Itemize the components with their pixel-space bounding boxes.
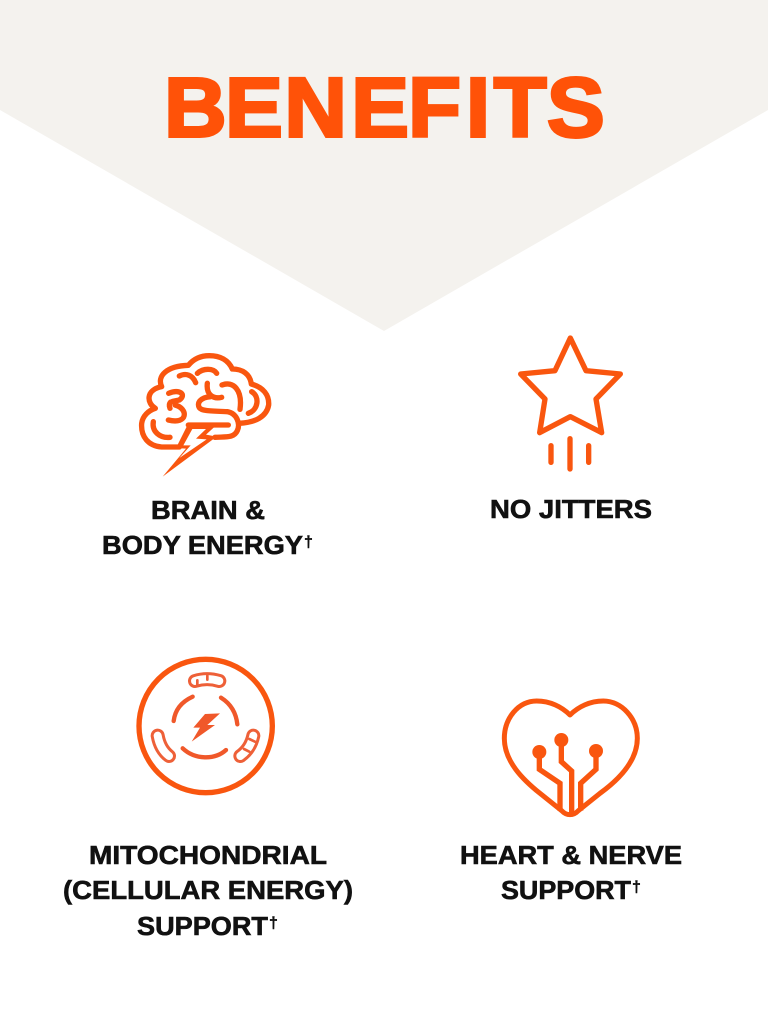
label: brain and body energy: BRAIN & (151, 497, 265, 525)
label: brain and body energy: BODY ENERGY (102, 532, 303, 560)
organelle: top (195, 676, 219, 686)
icon: mitochondria circle (139, 659, 272, 793)
label: mitochondrial support: (CELLULAR ENERGY) (63, 877, 353, 905)
organelle: right (240, 736, 255, 756)
label: mitochondrial support: † (269, 915, 278, 932)
label: heart and nerve support: SUPPORT (501, 877, 631, 905)
header banner (0, 0, 768, 331)
icon: star with motion lines (521, 338, 620, 469)
label: brain and body energy: † (304, 534, 313, 551)
label: heart and nerve support (460, 842, 682, 905)
label: mitochondrial support: MITOCHONDRIAL (89, 842, 327, 870)
label: brain and body energy (102, 497, 313, 560)
label: mitochondrial support: SUPPORT (137, 913, 268, 941)
label: mitochondrial support (63, 842, 353, 941)
organelle: left (158, 736, 169, 756)
icon: brain with lightning bolt (142, 356, 269, 477)
icon: heart with circuit (504, 701, 637, 815)
title: BENEFITS (164, 62, 605, 155)
label: no jitters: NO JITTERS (490, 496, 652, 524)
label: heart and nerve support: HEART & NERVE (460, 842, 682, 870)
lightning bolt (163, 423, 218, 477)
label: heart and nerve support: † (632, 879, 641, 896)
